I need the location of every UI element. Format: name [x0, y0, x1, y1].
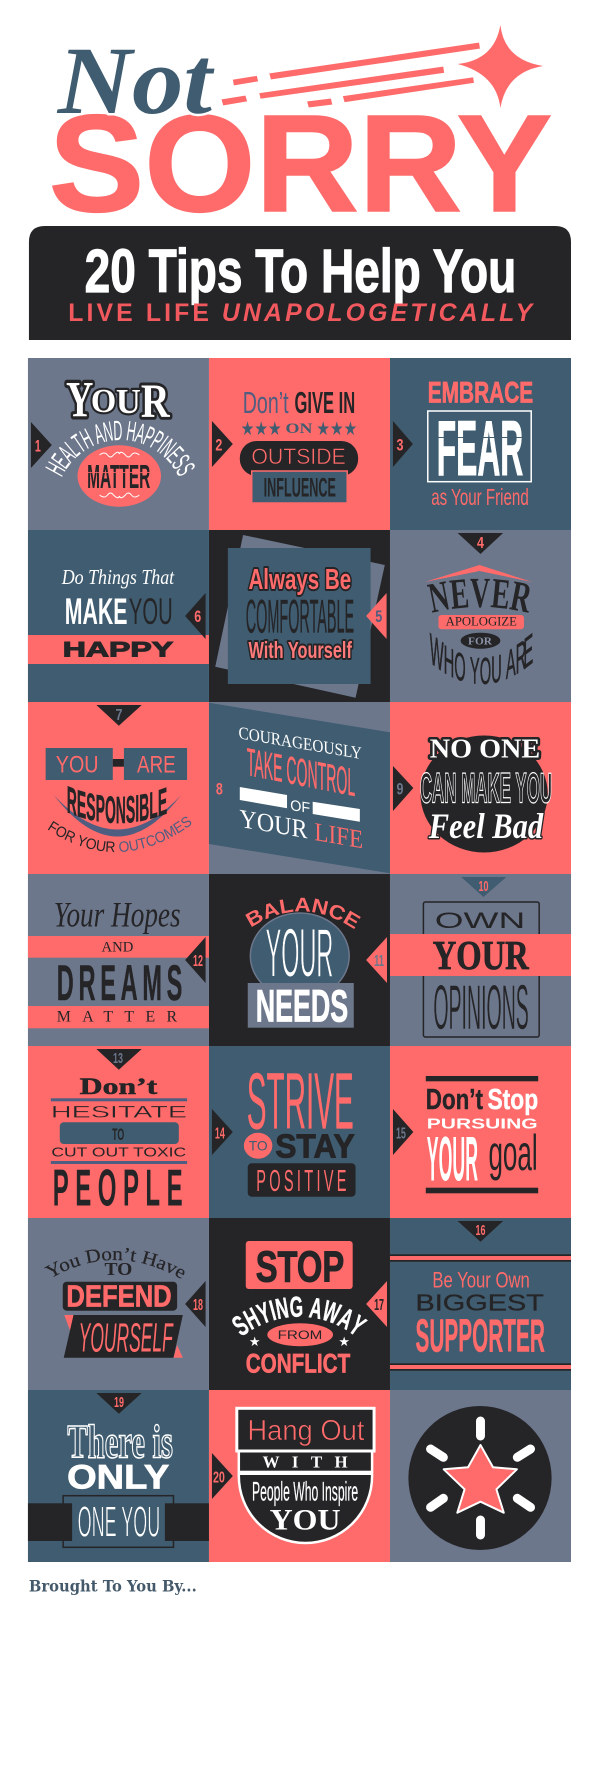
text: Feel bad: Feel Bad: [428, 806, 544, 846]
badge 8: 8: [216, 779, 223, 799]
panel: tip 4 Never apologize for who you are: [390, 530, 571, 702]
text: Responsible: O: [105, 789, 116, 832]
label: You: YOU: [56, 752, 99, 779]
band: Happy: HAPPY: [63, 639, 173, 662]
badge 1: [31, 422, 52, 468]
text: Your hopes: Your Hopes: [54, 895, 181, 935]
badge 3: [393, 421, 413, 467]
text: COMFORTABLE: [246, 591, 354, 643]
text: Balance: BALANCE: [245, 898, 361, 929]
panel: tip 20 Hang out with people who inspire you: People Who Inspire: [252, 1477, 358, 1507]
box: Fear: [428, 406, 531, 492]
text: Who you are: W: [430, 623, 444, 682]
text: With: WITH: [263, 1453, 348, 1472]
text: Shying away: Y: [253, 1296, 275, 1331]
label: Are: ARE: [137, 752, 176, 779]
text: Who you are: A: [506, 639, 516, 688]
panel: tip 16 Be your own biggest supporter: [390, 1218, 571, 1390]
badge 10: 10: [479, 878, 488, 895]
text: TAKE CONTROL: [247, 740, 355, 805]
badge 4: 4: [477, 535, 484, 552]
panel: tip 10 Own your opinions: [390, 874, 571, 1046]
text: Health and happiness: P: [146, 424, 169, 456]
text: Health and happiness: I: [152, 429, 174, 458]
text: Shying away: Y: [343, 1309, 371, 1343]
text: goal: goal: [488, 1125, 538, 1181]
text: Don't: Don’t: [243, 385, 289, 420]
text: Responsible: E: [158, 780, 167, 826]
text: Shying away: S: [227, 1310, 255, 1343]
text: Responsible: S: [126, 789, 135, 832]
box: Influence: INFLUENCE: [264, 473, 336, 503]
badge 10: [461, 877, 506, 897]
text: Only: ONLY: [67, 1458, 170, 1496]
circle: To: TO: [249, 1138, 268, 1154]
label: To: [60, 1122, 179, 1144]
badge 11: 11: [374, 953, 384, 970]
panel: tip 19 There is only one you: [28, 1390, 209, 1562]
white bars with Of: [240, 787, 360, 822]
text: Health and happiness: D: [113, 414, 123, 447]
panel: tip 7 You are responsible for your outcomes: [28, 702, 209, 874]
bottom stripes: [390, 1363, 571, 1371]
badge 4: [458, 533, 503, 554]
text: Embrace: EMBRACE: [428, 377, 533, 410]
badge 13: [96, 1049, 142, 1070]
text: Shying away: [227, 1291, 371, 1343]
text: Shying away: W: [318, 1295, 344, 1331]
badge 8: [212, 766, 233, 811]
stars and On: ★★★: [241, 419, 282, 440]
text: Health and happiness: P: [139, 420, 159, 453]
badge 16: 16: [476, 1222, 485, 1239]
ellipse: From: FROM: [278, 1328, 322, 1342]
black circle: [420, 736, 548, 852]
badge 2: 2: [215, 435, 222, 455]
rule: [51, 1161, 187, 1164]
heading panel: [29, 226, 571, 340]
text: Health and happiness: [39, 414, 202, 481]
badge 14: [212, 1109, 233, 1155]
text: Health and happiness: H: [39, 457, 72, 481]
panel: tip 18 You don't have to defend yourself: [28, 1218, 209, 1390]
text: Health and happiness: A: [132, 416, 149, 450]
box: Positive: POSITIVE: [256, 1163, 350, 1198]
text: Health and happiness: E: [160, 440, 190, 468]
text: Don't: Don’t: [80, 1074, 158, 1099]
word: Not: Not: [57, 28, 215, 134]
badge 15: 15: [396, 1125, 406, 1143]
text: Shying away: H: [239, 1302, 265, 1337]
stars and On: [241, 419, 357, 440]
icon: star: [444, 1445, 517, 1513]
circle: To: [244, 1133, 272, 1159]
band: And: AND: [102, 940, 134, 956]
subheading: Live life: LIVE LIFE: [68, 299, 209, 327]
box: Hang out: Hang Out: [247, 1415, 365, 1447]
text: Responsible: L: [149, 784, 158, 828]
text: Health and happiness: H: [125, 415, 138, 448]
text: Stop: Stop: [487, 1084, 538, 1116]
text: Your: YOUR: [240, 804, 308, 844]
band: Matter: [28, 1006, 209, 1028]
text: There is: There is: [67, 1415, 173, 1468]
text: Stay: STAY: [275, 1127, 355, 1164]
connector bar: [113, 759, 124, 767]
text: With yourself: With Yourself: [248, 637, 352, 663]
navy slanted banner: [209, 703, 390, 873]
text: For your outcomes: FOR YOUR OUTCOMES: [48, 816, 192, 852]
badge 5: [366, 593, 387, 639]
text: Health and happiness: T: [66, 428, 91, 459]
badge 19: 19: [114, 1394, 124, 1411]
panel: tip 12 Your hopes and dreams matter: DREAMS: [57, 955, 187, 1011]
text: Responsible: R: [67, 779, 77, 825]
text: Who you are: Y: [470, 650, 480, 693]
text: Courageously: COURAGEOUSLY: [239, 722, 362, 763]
badge 17: [366, 1281, 387, 1327]
text: Health and happiness: N: [101, 415, 115, 448]
badge 14: 14: [215, 1125, 225, 1143]
label: Apologize: APOLOGIZE: [446, 614, 517, 629]
box: Needs: [248, 981, 354, 1032]
text: Pursuing: PURSUING: [427, 1115, 538, 1132]
label: Defend: DEFEND: [66, 1279, 172, 1314]
text: Health and happiness: S: [170, 458, 202, 481]
white bars with Of: OF: [290, 797, 310, 817]
text: Own: OWN: [435, 908, 525, 933]
panel: tip 20 Hang out with people who inspire you: [209, 1390, 390, 1562]
box: Influence: [252, 471, 347, 503]
text: Your: [66, 371, 170, 428]
text: Never: NEVER: [426, 578, 530, 613]
badge 18: 18: [193, 1297, 203, 1314]
band: And: [28, 936, 209, 958]
text: Give in: GIVE IN: [295, 385, 355, 420]
pill: Outside: [240, 441, 358, 476]
text: Who you are: E: [523, 625, 533, 680]
panel: tip 14 Strive to stay positive: [209, 1046, 390, 1218]
text: Your: Y: [66, 371, 93, 428]
text: Responsible: P: [96, 788, 105, 832]
stars: ★: [249, 1334, 261, 1349]
panel: tip 9 No one can make you feel bad: [390, 702, 571, 874]
panel: tip 3 Embrace fear as your friend: [390, 358, 571, 530]
panel: tip 12 Your hopes and dreams matter: [28, 874, 209, 1046]
badge 17: 17: [374, 1297, 384, 1314]
panel: tip 11 Balance your needs: [209, 874, 390, 1046]
text: You don't have: You Don’t Have: [44, 1248, 184, 1278]
band with frame: One you: ONE YOU: [78, 1498, 160, 1547]
text: You: YOU: [270, 1503, 341, 1536]
panel: tip 11 Balance your needs: YOUR: [266, 915, 333, 992]
badge 12: 12: [193, 953, 203, 970]
text: Shying away: A: [307, 1292, 325, 1326]
icon: roof chevron: [425, 565, 532, 582]
band with frame: One you: [28, 1496, 209, 1547]
stars: [249, 1334, 350, 1349]
subheading: Unapologetically: UNAPOLOGETICALLY: [222, 299, 535, 327]
badge 11: [366, 937, 387, 983]
divider bar: [239, 1471, 372, 1475]
badge 1: 1: [35, 436, 41, 456]
band: Happy: [28, 635, 209, 664]
text: Shying away: N: [273, 1292, 291, 1326]
text: Who you are: [430, 623, 533, 693]
badge 20: 20: [213, 1469, 225, 1487]
panel: tip 6 Do things that make you happy: [28, 530, 209, 702]
black circle: [408, 1406, 552, 1550]
badge 15: [393, 1109, 413, 1155]
text: Life: LIFE: [314, 817, 363, 854]
badge 3: 3: [396, 435, 403, 455]
stars and On: ★★★: [316, 419, 357, 440]
stars: ★: [338, 1334, 350, 1349]
panel: tip 15 Don't stop pursuing your goal: [390, 1046, 571, 1218]
text: Responsible: S: [86, 786, 96, 830]
text: Health and happiness: L: [59, 434, 85, 463]
navy square: [228, 548, 371, 684]
icon: four point star: [458, 25, 543, 108]
stars and On: ON: [286, 421, 313, 437]
label: Are: [124, 748, 187, 780]
box: Positive: [248, 1163, 356, 1198]
panel: tip 13 Don't hesitate to cut out toxic people: [28, 1046, 209, 1218]
text: Do things that: Do Things That: [61, 565, 175, 589]
text: Health and happiness: E: [45, 448, 76, 474]
text: Health and happiness: S: [165, 449, 196, 474]
text: STRIVE: [247, 1056, 354, 1145]
panel: tip 5 Always be comfortable with yourself: [209, 530, 390, 702]
band: Your: [390, 933, 571, 978]
text: Your: U: [116, 382, 141, 421]
circle: [250, 913, 349, 999]
badge 7: [96, 705, 142, 726]
text: Make: MAKE: [65, 591, 127, 632]
text: Health and happiness: A: [52, 439, 81, 468]
badge 20: [212, 1453, 233, 1499]
panel: tip 18 You don't have to defend yourself: YOURSELF: [79, 1315, 174, 1361]
badge 7: 7: [115, 707, 122, 724]
text: Conflict: CONFLICT: [246, 1348, 351, 1378]
box: Hang out: [237, 1408, 374, 1451]
panel: tip 8 Courageously take control of your life: [209, 702, 390, 874]
pill: Outside: OUTSIDE: [251, 444, 346, 469]
top bar: [426, 1076, 538, 1081]
text: Responsible: N: [116, 790, 126, 832]
label: You: [46, 748, 113, 780]
badge 2: [212, 421, 233, 467]
text: Shying away: A: [333, 1302, 359, 1337]
text: Who you are: O: [480, 651, 491, 693]
text: Your: R: [141, 376, 170, 428]
badge 19: [96, 1393, 142, 1414]
panel: tip 2 Don't give in on outside influence: [209, 358, 390, 530]
text: Who you are: R: [516, 630, 526, 684]
badge 18: [185, 1281, 206, 1327]
title: Not Sorry logo: [49, 25, 552, 241]
badge 6: [185, 593, 206, 639]
outline frame: [423, 902, 539, 1037]
banner: Yourself: [64, 1315, 183, 1361]
badge 16: [458, 1221, 503, 1242]
text: Don't: Don’t: [426, 1084, 483, 1116]
badge 5: 5: [375, 607, 382, 626]
badge 12: [185, 937, 206, 983]
text: Who you are: H: [444, 636, 454, 687]
swoosh under Responsible: [54, 795, 181, 836]
text: Cut out toxic: CUT OUT TOXIC: [51, 1146, 186, 1160]
text: Responsible: [67, 779, 167, 832]
panel: tip 1 Your health and happiness matter: [28, 358, 209, 530]
ellipse with Matter: MATTER: [87, 458, 150, 495]
icon: rays: [431, 1421, 531, 1535]
band: Matter: MATTER: [57, 1009, 177, 1026]
icon: shooting star streaks: [221, 42, 480, 108]
text: Health and happiness: N: [154, 433, 182, 463]
text: Health and happiness: H: [75, 422, 98, 455]
text: Shying away: I: [266, 1295, 279, 1328]
text: Always be: Always Be: [248, 564, 351, 596]
label: For: FOR: [468, 636, 492, 648]
panel: closing star icon: [390, 1390, 571, 1562]
top stripes: [390, 1254, 571, 1262]
text: No one: NO ONE: [430, 733, 540, 763]
text: Be your own: Be Your Own: [432, 1267, 530, 1292]
label: For: [461, 633, 500, 649]
badge 13: 13: [113, 1050, 123, 1067]
ellipse: From: [267, 1323, 333, 1346]
tilted gray square: [215, 535, 385, 698]
text: Your: O: [91, 382, 116, 420]
box: Stop: STOP: [256, 1243, 344, 1292]
badge 9: [393, 766, 413, 811]
text: Who you are: U: [491, 648, 502, 693]
band: Your: YOUR: [433, 933, 529, 978]
text: Hesitate: HESITATE: [51, 1102, 187, 1121]
bowl shape: [239, 1450, 372, 1543]
badge 6: 6: [194, 607, 201, 626]
panel: tip 13 Don't hesitate to cut out toxic people: PEOPLE: [53, 1159, 189, 1217]
text: as your friend: as Your Friend: [431, 484, 529, 510]
ellipse with Matter: [77, 445, 161, 507]
text: Responsible: B: [139, 786, 149, 831]
text: Biggest: BIGGEST: [416, 1290, 544, 1316]
badge 9: 9: [396, 779, 403, 799]
text: Shying away: G: [289, 1291, 304, 1324]
text: Responsible: I: [135, 788, 139, 831]
text: Who you are: O: [454, 644, 466, 691]
text: You: YOU: [129, 591, 173, 632]
footer text: Brought to you by: Brought To You By...: [29, 1577, 197, 1596]
rule: [51, 1098, 187, 1101]
text: To: TO: [105, 1259, 132, 1279]
text: Responsible: E: [77, 783, 86, 828]
panel: tip 17 Stop shying away from conflict: [209, 1218, 390, 1390]
box: Needs: NEEDS: [256, 981, 348, 1032]
label: To: TO: [112, 1125, 124, 1144]
text: Health and happiness: A: [90, 417, 108, 450]
word: SORRY: SORRY: [49, 87, 552, 241]
bottom bar: [426, 1188, 538, 1193]
